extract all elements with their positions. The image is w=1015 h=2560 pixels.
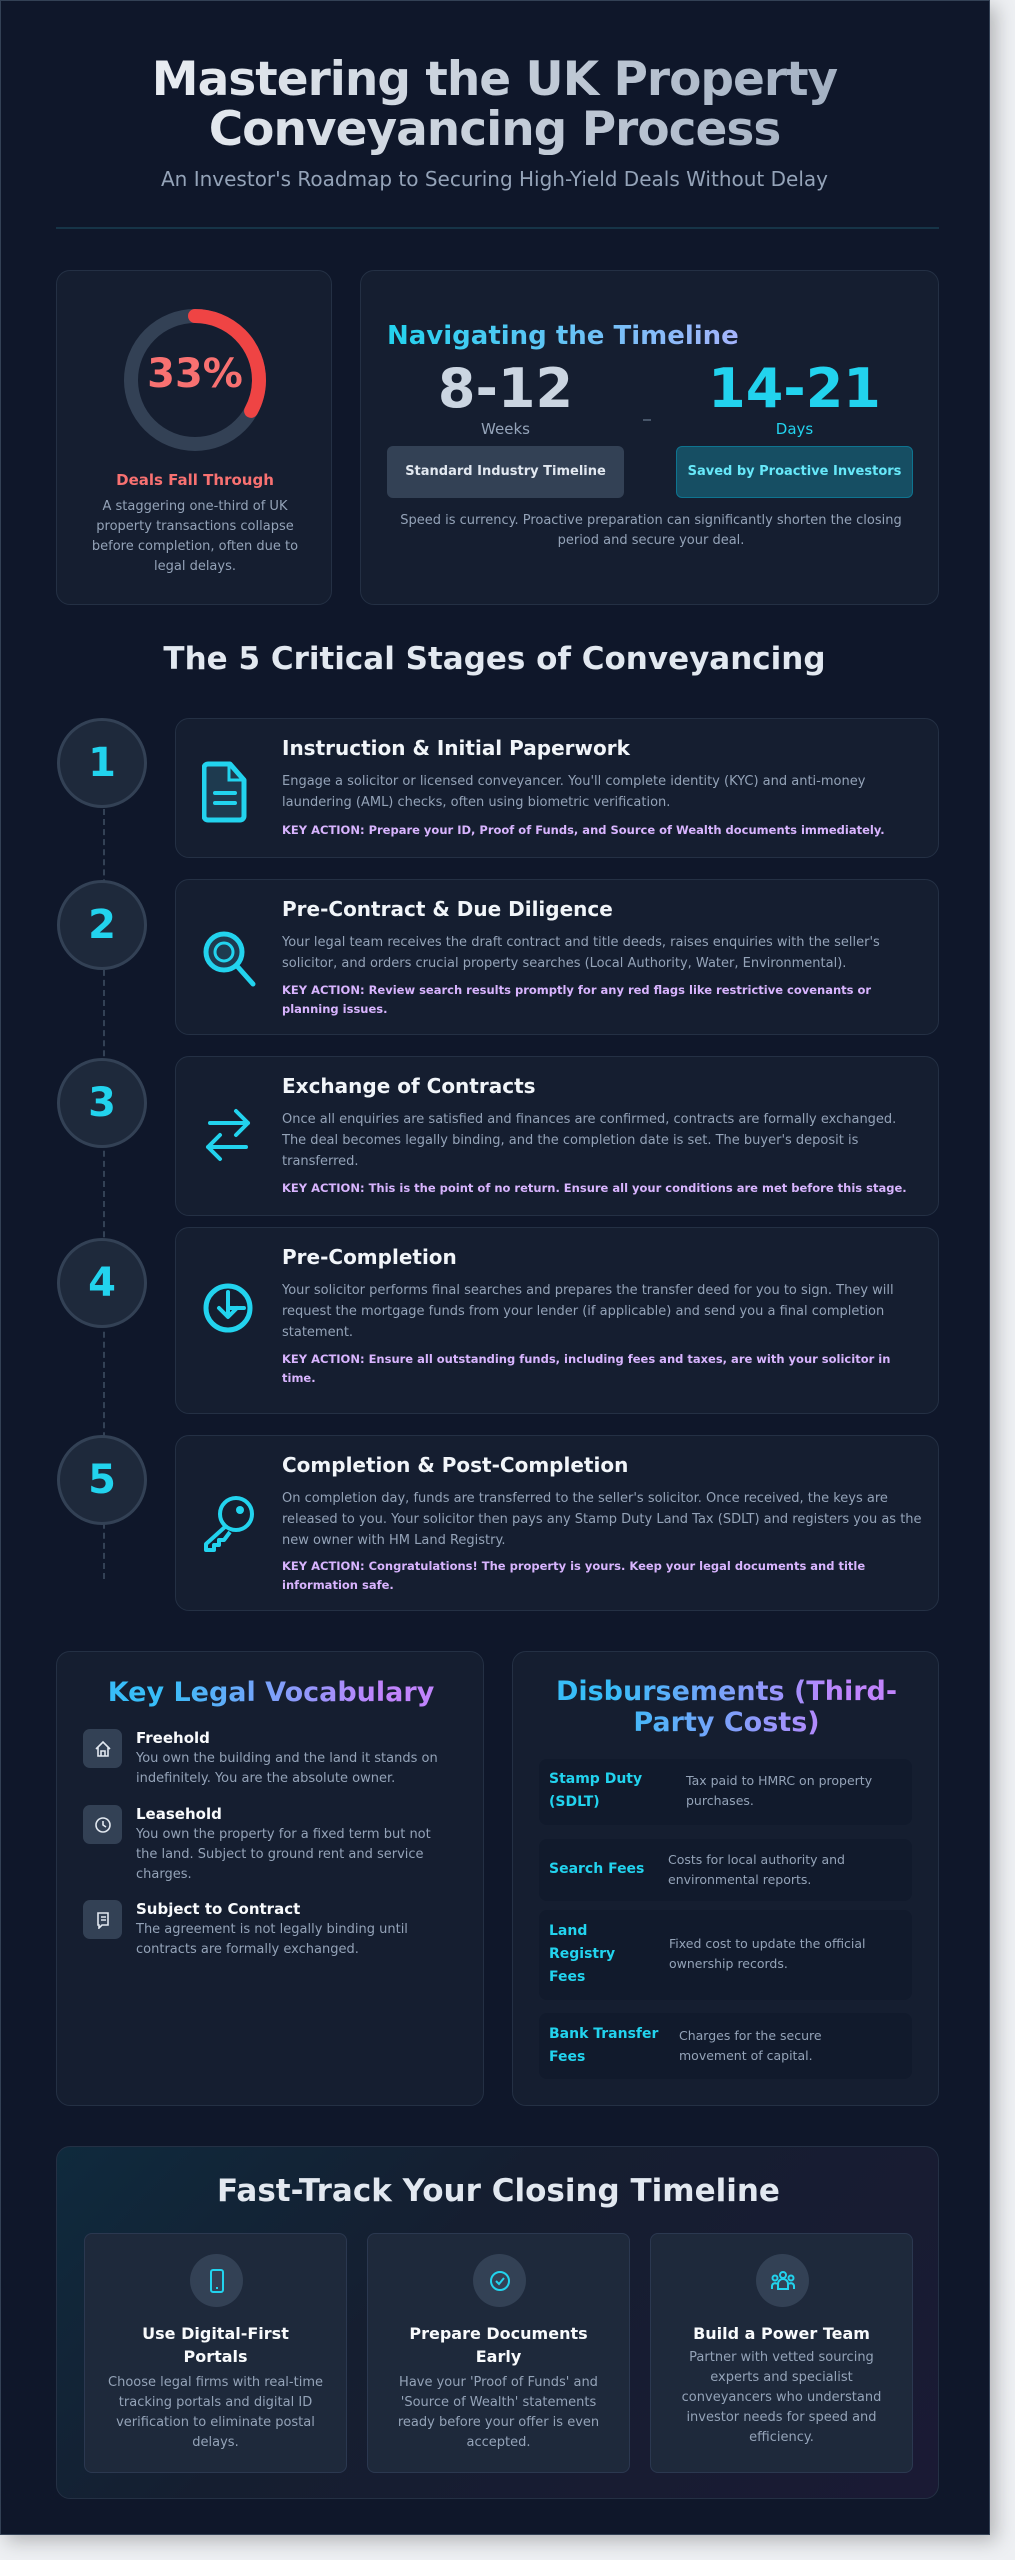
card: stage 1: Instruction & Initial Paperwork xyxy=(282,736,630,760)
heading: Disbursements (Third-Party Costs) xyxy=(556,1676,897,1738)
number badge 2 xyxy=(57,880,147,970)
row: stamp duty: (SDLT) xyxy=(549,1794,600,1810)
tip: power team: Partner with vetted sourcing experts and specialist conveyancers who understand investor needs for speed and efficiency. xyxy=(682,2350,881,2445)
card: stage 4: KEY ACTION: Ensure all outstanding funds, including fees and taxes, are with your solicitor in time. xyxy=(282,1352,890,1385)
row: stamp duty: Stamp Duty xyxy=(549,1771,642,1787)
tip: documents early: Have your 'Proof of Funds' and 'Source of Wealth' statements ready before your offer is even accepted. xyxy=(398,2375,599,2450)
panel: navigating the timeline xyxy=(360,270,939,605)
card: stage 5: Completion & Post-Completion xyxy=(282,1453,628,1477)
label: saved: Saved by Proactive Investors xyxy=(688,464,901,479)
term: subject to contract: Subject to Contract xyxy=(136,1900,300,1918)
row: bank transfer: Fees xyxy=(549,2049,585,2065)
stage 4 xyxy=(57,1227,939,1414)
card: stage 1: KEY ACTION: Prepare your ID, Proof of Funds, and Source of Wealth documents immediately. xyxy=(282,823,885,837)
card: stage 3: KEY ACTION: This is the point of no return. Ensure all your conditions are met before this stage. xyxy=(282,1181,907,1195)
number badge 4: 4 xyxy=(88,1260,116,1306)
heading: Fast-Track Your Closing Timeline xyxy=(217,2173,780,2209)
panel: key legal vocabulary xyxy=(56,1651,484,2106)
card: stage 1 xyxy=(175,718,939,858)
icon: document xyxy=(202,762,246,822)
section heading: stages: The 5 Critical Stages of Conveyancing xyxy=(163,641,826,677)
card: stage 1: Engage a solicitor or licensed conveyancer. You'll complete identity (KYC) and anti-money laundering (AML) checks, often using biometric verification. xyxy=(282,774,865,810)
number badge 3: 3 xyxy=(88,1080,116,1126)
stat: 14-21 days: 14-21 xyxy=(708,357,881,420)
label: standard: Standard Industry Timeline xyxy=(405,464,606,479)
title: Mastering the UK Property xyxy=(152,52,837,107)
stat label: Deals Fall Through xyxy=(116,471,274,489)
stage 1 xyxy=(57,718,939,858)
row: bank transfer: Charges for the secure movement of capital. xyxy=(679,2028,822,2063)
stage 5 xyxy=(57,1435,939,1611)
card: stage 5: KEY ACTION: Congratulations! The property is yours. Keep your legal documents and title information safe. xyxy=(282,1559,865,1592)
row: search fees: Search Fees xyxy=(549,1861,644,1877)
card: stage 3: Once all enquiries are satisfied and finances are confirmed, contracts are formally exchanged. The deal becomes legally binding, and the completion date is set. The buyer's deposit is transferred. xyxy=(282,1112,896,1169)
term: freehold xyxy=(83,1729,438,1786)
card: stage 2: Your legal team receives the draft contract and title deeds, raises enquiries with the seller's solicitor, and orders crucial property searches (Local Authority, Water, Environmental). xyxy=(282,935,880,971)
panel: deals fall through stat xyxy=(56,270,332,605)
stat value: 33% xyxy=(147,351,243,397)
title xyxy=(1,55,988,155)
card: stage 2 xyxy=(175,879,939,1035)
card: stage 4: Pre-Completion xyxy=(282,1245,457,1269)
number badge 4 xyxy=(57,1238,147,1328)
icon: exchange arrows xyxy=(206,1108,250,1162)
stat description: A staggering one-third of UK property transactions collapse before completion, often due to legal delays. xyxy=(92,499,298,574)
term: leasehold: Leasehold xyxy=(136,1805,222,1823)
panel: fast-track xyxy=(56,2146,939,2499)
card: stage 3 xyxy=(175,1056,939,1216)
card: stage 4 xyxy=(175,1227,939,1414)
icon: key xyxy=(204,1496,254,1552)
tip: digital portals: Use Digital-First Portals xyxy=(142,2324,289,2366)
row: land registry: Registry xyxy=(549,1946,615,1962)
description: Speed is currency. Proactive preparation can significantly shorten the closing period and secure your deal. xyxy=(400,513,902,548)
number badge 5 xyxy=(57,1435,147,1525)
card: stage 2: KEY ACTION: Review search results promptly for any red flags like restrictive covenants or planning issues. xyxy=(282,983,871,1016)
tip: power team: Build a Power Team xyxy=(693,2324,870,2343)
term: freehold: Freehold xyxy=(136,1729,210,1747)
tip: documents early: Prepare Documents Early xyxy=(409,2324,588,2366)
icon: magnifier xyxy=(204,932,256,986)
stage 2 xyxy=(57,879,939,1035)
stat: 14-21 days: Days xyxy=(776,420,813,438)
term: leasehold: You own the property for a fixed term but not the land. Subject to ground rent and service charges. xyxy=(136,1827,431,1882)
row: search fees xyxy=(539,1839,912,1901)
card: stage 2: Pre-Contract & Due Diligence xyxy=(282,897,613,921)
card: stage 3: Exchange of Contracts xyxy=(282,1074,536,1098)
term: subject to contract xyxy=(83,1900,408,1957)
row: land registry: Fees xyxy=(549,1969,585,1985)
card: stage 5 xyxy=(175,1435,939,1611)
tip: digital portals: Choose legal firms with real-time tracking portals and digital ID verification to eliminate postal delays. xyxy=(108,2375,323,2450)
heading: Key Legal Vocabulary xyxy=(108,1677,434,1708)
donut chart 33% xyxy=(124,309,266,451)
term: freehold: You own the building and the land it stands on indefinitely. You are the absolute owner. xyxy=(136,1751,438,1786)
heading: Navigating the Timeline xyxy=(387,321,739,351)
number badge 2: 2 xyxy=(88,902,116,948)
number badge 1 xyxy=(57,718,147,808)
number badge 3 xyxy=(57,1058,147,1148)
icon: clock download xyxy=(204,1284,252,1332)
row: land registry: Land xyxy=(549,1923,587,1939)
number badge 5: 5 xyxy=(88,1457,116,1503)
label: standard xyxy=(387,446,624,498)
stat: 8-12 weeks: Weeks xyxy=(481,420,530,438)
row: land registry: Fixed cost to update the official ownership records. xyxy=(669,1936,866,1971)
row: stamp duty xyxy=(539,1759,912,1825)
term: subject to contract: The agreement is not legally binding until contracts are formally exchanged. xyxy=(136,1922,408,1957)
tip: digital portals xyxy=(84,2233,347,2473)
stage 3 xyxy=(57,1056,939,1216)
card: stage 4: Your solicitor performs final searches and prepares the transfer deed for you to sign. They will request the mortgage funds from your lender (if applicable) and send you a final completion statement. xyxy=(282,1283,894,1340)
tip: power team xyxy=(650,2233,913,2473)
row: bank transfer: Bank Transfer xyxy=(549,2026,658,2042)
row: land registry xyxy=(539,1910,912,2000)
card: stage 5: On completion day, funds are transferred to the seller's solicitor. Once received, the keys are released to you. Your solicitor then pays any Stamp Duty Land Tax (SDLT) and registers you as the new owner with HM Land Registry. xyxy=(282,1491,922,1548)
label: saved xyxy=(676,446,913,498)
row: stamp duty: Tax paid to HMRC on property purchases. xyxy=(686,1773,872,1808)
tip: documents early xyxy=(367,2233,630,2473)
title: Conveyancing Process xyxy=(209,102,780,157)
row: search fees: Costs for local authority and environmental reports. xyxy=(668,1852,845,1887)
panel: disbursements xyxy=(512,1651,939,2106)
row: bank transfer xyxy=(539,2013,912,2079)
term: leasehold xyxy=(83,1805,431,1882)
stat: 8-12 weeks: 8-12 xyxy=(438,357,573,420)
subtitle: An Investor's Roadmap to Securing High-Yield Deals Without Delay xyxy=(161,167,828,191)
number badge 1: 1 xyxy=(88,740,116,786)
